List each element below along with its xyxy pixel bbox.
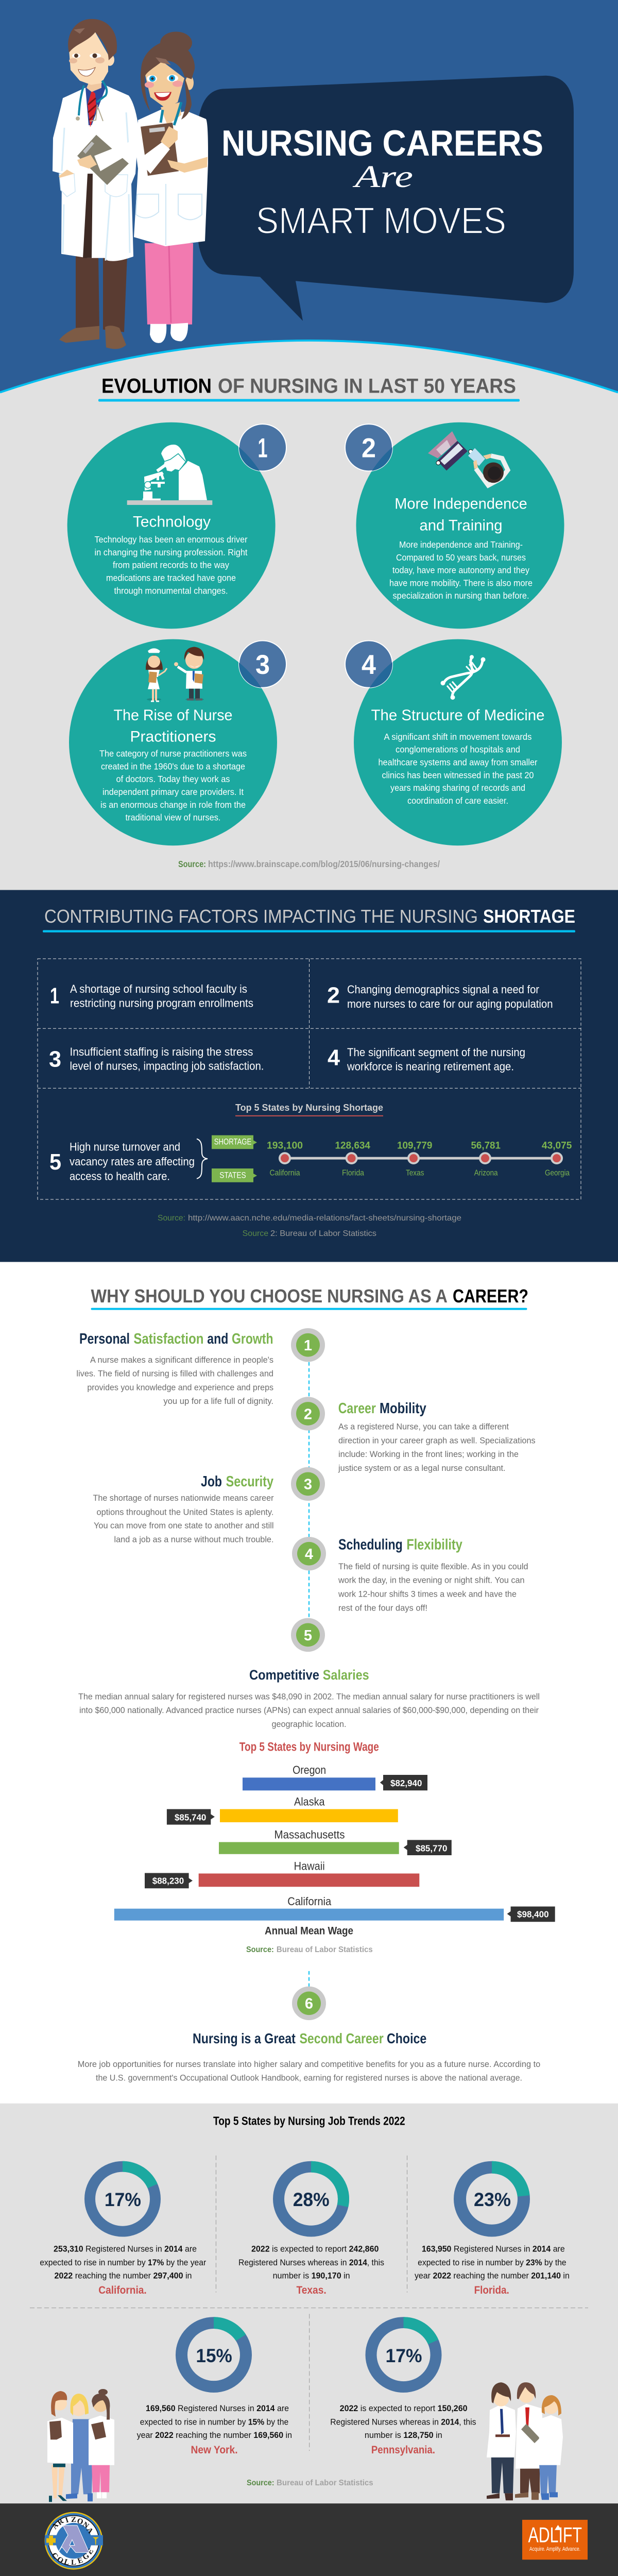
- illustration: male nurse: [53, 19, 139, 349]
- number badge 1: [238, 423, 287, 472]
- block: career mobility: As a registered Nurse, you can take a different: [338, 1421, 509, 1431]
- text: pennsylvania: Registered Nurses whereas in 2014, this: [330, 2417, 476, 2427]
- chart: shortage timeline: [267, 1140, 572, 1177]
- block: scheduling flexibility: work 12-hour shifts 3 times a week and have the: [338, 1589, 517, 1599]
- block: personal satisfaction and growth: lives. The field of nursing is filled with challenges and: [76, 1369, 273, 1379]
- block: job security: Security: [226, 1473, 273, 1490]
- number badge 3: [238, 640, 287, 688]
- text: independence description: More independence and Training-: [399, 539, 523, 550]
- bar: california: $98,400: [517, 1909, 549, 1920]
- text: pennsylvania: Pennsylvania.: [371, 2444, 435, 2456]
- logo: adlift: ADLIFT: [528, 2523, 582, 2547]
- title: smart moves: SMART MOVES: [256, 200, 506, 242]
- bar: massachusetts: Massachusetts: [274, 1828, 345, 1841]
- text: technology description: through monumental changes.: [114, 585, 228, 596]
- text: structure of medicine description: conglomerations of hospitals and: [396, 744, 520, 755]
- factor 4: The significant segment of the nursing: [347, 1046, 525, 1059]
- chart: shortage timeline: 193,100: [267, 1140, 303, 1151]
- text: technology description: from patient records to the way: [113, 560, 229, 570]
- chart: shortage timeline: Texas: [406, 1168, 424, 1177]
- sources: shortage: http://www.aacn.nche.edu/media-relations/fact-sheets/nursing-shortage: [188, 1214, 461, 1223]
- block: career mobility: [338, 1400, 536, 1473]
- donut: texas: 28%: [293, 2189, 330, 2210]
- factor 1: A shortage of nursing school faculty is: [70, 982, 247, 995]
- block: job security: The shortage of nurses nationwide means career: [93, 1493, 274, 1503]
- number badge 4: [345, 640, 393, 688]
- factor 2: [327, 983, 553, 1010]
- panel: technology: [67, 422, 276, 629]
- factor 1: restricting nursing program enrollments: [70, 997, 253, 1010]
- section background: evolution: [0, 341, 618, 890]
- block: career mobility: Career: [338, 1400, 376, 1417]
- step marker 1: [291, 1328, 325, 1362]
- text: new york: New York.: [191, 2444, 238, 2456]
- text: new york: year 2022 reaching the number 169,560 in: [137, 2430, 292, 2440]
- bar: hawaii: Hawaii: [294, 1860, 325, 1872]
- text: new york: [137, 2403, 292, 2456]
- text: florida: expected to rise in number by 23% by the: [418, 2258, 566, 2267]
- text: structure of medicine description: years making sharing of records and: [390, 783, 525, 793]
- illustration: female nurse: [134, 31, 208, 343]
- step marker 2: 2: [304, 1406, 312, 1422]
- icon: dna helix: [441, 655, 485, 700]
- bar: california: California: [287, 1895, 332, 1908]
- donut: pennsylvania: [371, 2323, 436, 2387]
- panel: rise of nurse practitioners: [69, 639, 277, 845]
- factor 3: Insufficient staffing is raising the stress: [70, 1045, 253, 1058]
- label: shortage: [212, 1135, 257, 1149]
- number badge 2: [345, 423, 393, 472]
- donut: new york: [181, 2323, 246, 2387]
- chart: shortage timeline: Arizona: [474, 1168, 498, 1177]
- factor 5: [49, 1141, 195, 1183]
- text: pennsylvania: 2022 is expected to report 150,260: [340, 2403, 468, 2413]
- text: structure of medicine description: coordination of care easier.: [407, 795, 508, 806]
- title: nursing careers: NURSING CAREERS: [221, 123, 543, 163]
- donut: california: 17%: [105, 2189, 141, 2210]
- text: florida: 163,950 Registered Nurses in 2014 are: [422, 2244, 565, 2254]
- icon: top-down laptop and worker: [428, 431, 508, 485]
- donut: texas: [279, 2167, 344, 2231]
- step marker 6: 6: [305, 1996, 313, 2012]
- logo: adlift: [522, 2520, 588, 2560]
- heading: structure of medicine: The Structure of Medicine: [371, 707, 545, 724]
- text: texas: number is 190,170 in: [273, 2271, 350, 2281]
- text: texas: [238, 2244, 384, 2296]
- text: nurse practitioners description: The category of nurse practitioners was: [99, 749, 247, 759]
- text: structure of medicine description: A significant shift in movement towards: [384, 732, 532, 742]
- bar: hawaii: [145, 1860, 419, 1888]
- curved cyan divider: [0, 341, 618, 393]
- block: competitive salaries: into $60,000 nationally. Advanced practice nurses (APNs) can expect annual salaries of $60,000-$90,000, depending on their: [79, 1705, 539, 1715]
- text: technology description: [94, 534, 248, 596]
- factor 1: 1: [50, 984, 59, 1009]
- factor 3: [49, 1045, 264, 1073]
- text: texas: 2022 is expected to report 242,860: [251, 2244, 379, 2254]
- block: competitive salaries: geographic location.: [272, 1719, 346, 1729]
- factor 1: [50, 982, 253, 1010]
- factor 4: workforce is nearing retirement age.: [347, 1060, 514, 1073]
- text: technology description: Technology has been an enormous driver: [94, 534, 248, 545]
- source: brainscape: https://www.brainscape.com/blog/2015/06/nursing-changes/: [208, 859, 440, 869]
- panel: job trends: [0, 2104, 618, 2503]
- chart title: nursing wage: Top 5 States by Nursing Wage: [239, 1740, 379, 1754]
- speech bubble with title: [197, 76, 574, 321]
- heading: evolution of nursing: EVOLUTION: [101, 375, 212, 398]
- text: texas: Texas.: [297, 2284, 327, 2296]
- bar: oregon: $82,940: [390, 1778, 422, 1788]
- factor 3: level of nurses, impacting job satisfaction.: [70, 1060, 264, 1073]
- bar: massachusetts: [219, 1828, 452, 1855]
- logo: arizona college: COLLEGE: [49, 2547, 95, 2567]
- block: competitive salaries: The median annual salary for registered nurses was $48,090 in 2002. The median annual salary for nurse practitioners is well: [78, 1691, 540, 1701]
- block: career mobility: Mobility: [380, 1400, 426, 1417]
- text: structure of medicine description: [379, 732, 538, 806]
- text: california: [40, 2244, 207, 2296]
- block: scheduling flexibility: work the day, in the evening or night shift. You can: [338, 1575, 525, 1585]
- block: scheduling flexibility: rest of the four days off!: [338, 1603, 427, 1613]
- icon: nurse and doctor: [146, 647, 204, 702]
- donut: new york: 15%: [196, 2345, 232, 2366]
- block: personal satisfaction and growth: and: [207, 1331, 228, 1347]
- text: new york: expected to rise in number by 15% by the: [140, 2417, 288, 2427]
- logo: arizona college: [44, 2512, 103, 2570]
- step marker 6: [292, 1987, 326, 2020]
- panel: independence and training: [356, 422, 564, 629]
- block: scheduling flexibility: The field of nursing is quite flexible. As in you could: [338, 1562, 528, 1571]
- block: scheduling flexibility: Scheduling: [338, 1537, 403, 1553]
- label: shortage: SHORTAGE: [214, 1137, 251, 1146]
- block: competitive salaries: Competitive: [249, 1667, 319, 1683]
- heading: evolution of nursing: [98, 375, 520, 401]
- text: nurse practitioners description: traditional view of nurses.: [125, 812, 220, 823]
- panel: structure of medicine: [354, 639, 562, 845]
- block: personal satisfaction and growth: A nurse makes a significant difference in people's: [90, 1355, 273, 1365]
- heading: evolution of nursing: OF NURSING IN LAST 50 YEARS: [218, 375, 516, 398]
- text: new york: 169,560 Registered Nurses in 2014 are: [146, 2403, 289, 2413]
- factor 2: Changing demographics signal a need for: [347, 983, 539, 996]
- icon: scientist at microscope: [127, 445, 212, 505]
- source: wage chart: Bureau of Labor Statistics: [277, 1945, 373, 1954]
- bar: alaska: Alaska: [294, 1795, 325, 1808]
- text: florida: year 2022 reaching the number 201,140 in: [415, 2271, 570, 2281]
- number badge 1: 1: [258, 433, 267, 463]
- text: florida: [415, 2244, 570, 2296]
- chart: shortage timeline: 128,634: [335, 1140, 370, 1151]
- sources: shortage: Source: [243, 1229, 268, 1238]
- text: technology description: medications are tracked have gone: [106, 573, 236, 583]
- block: second career choice: Choice: [387, 2030, 426, 2046]
- number badge 2: 2: [362, 433, 376, 463]
- chart: nursing wage bars: [114, 1764, 555, 1937]
- source: job trends: Bureau of Labor Statistics: [277, 2479, 373, 2487]
- block: career mobility: direction in your career graph as well. Specializations: [338, 1435, 536, 1445]
- block: personal satisfaction and growth: Personal: [79, 1331, 130, 1347]
- bar: oregon: Oregon: [293, 1764, 326, 1776]
- bar: oregon: [243, 1764, 427, 1790]
- factor 4: 4: [328, 1045, 340, 1071]
- block: scheduling flexibility: Flexibility: [406, 1537, 462, 1553]
- step marker 4: [292, 1537, 326, 1570]
- axis label: annual mean wage: Annual Mean Wage: [265, 1925, 353, 1937]
- chart: shortage timeline: 56,781: [471, 1140, 501, 1151]
- text: nurse practitioners description: [99, 749, 247, 823]
- title: are: Are: [352, 159, 413, 194]
- block: competitive salaries: Salaries: [323, 1667, 369, 1683]
- heading: technology: Technology: [133, 514, 211, 530]
- text: structure of medicine description: healthcare systems and away from smaller: [379, 757, 538, 768]
- logo: arizona college: ARIZONA: [50, 2516, 95, 2535]
- factor 4: [328, 1045, 525, 1073]
- text: florida: Florida.: [474, 2284, 509, 2296]
- text: nurse practitioners description: is an enormous change in role from the: [100, 800, 246, 810]
- heading: rise of nurse practitioners: [114, 707, 233, 745]
- label: states: [212, 1168, 257, 1182]
- factor 5: vacancy rates are affecting: [70, 1155, 195, 1168]
- source: wage chart: Source:: [246, 1945, 274, 1954]
- bar: california: [114, 1895, 555, 1922]
- text: independence description: today, have more autonomy and they: [392, 565, 529, 575]
- text: nurse practitioners description: of doctors. Today they work as: [116, 774, 230, 784]
- sources: shortage: [158, 1214, 461, 1238]
- block: second career choice: More job opportunities for nurses translate into higher salary and competitive benefits for you as a future nurse. According to: [78, 2059, 540, 2069]
- text: nurse practitioners description: created in the 1960's due to a shortage: [101, 761, 245, 771]
- heading: why choose nursing: CAREER?: [453, 1286, 528, 1307]
- bar: hawaii: $88,230: [152, 1875, 184, 1886]
- panel: contributing factors: [0, 890, 618, 1262]
- factor 5: 5: [49, 1149, 61, 1175]
- footer: [0, 2503, 618, 2576]
- donut: pennsylvania: 17%: [385, 2345, 422, 2366]
- heading: more independence and training: More Independence: [394, 496, 527, 513]
- number badge 3: 3: [255, 650, 270, 680]
- factor 2: more nurses to care for our aging population: [347, 997, 553, 1010]
- block: job security: You can move from one state to another and still: [94, 1521, 274, 1531]
- step marker 5: [291, 1618, 325, 1652]
- illustration: nurses group left: [47, 2389, 114, 2502]
- sources: shortage: 2: Bureau of Labor Statistics: [270, 1229, 376, 1238]
- block: personal satisfaction and growth: [76, 1331, 273, 1406]
- block: second career choice: Second Career: [300, 2030, 384, 2046]
- bar: alaska: $85,740: [175, 1812, 206, 1822]
- text: pennsylvania: number is 128,750 in: [365, 2430, 442, 2440]
- block: career mobility: include: Working in the front lines; working in the: [338, 1449, 519, 1459]
- block: career mobility: justice system or as a legal nurse consultant.: [338, 1463, 506, 1473]
- step marker 2: [291, 1397, 325, 1431]
- text: pennsylvania: [330, 2403, 476, 2456]
- heading: contributing factors: [43, 906, 575, 933]
- block: personal satisfaction and growth: Growth: [232, 1331, 273, 1347]
- step marker 4: 4: [305, 1546, 313, 1563]
- number badge 4: 4: [362, 650, 376, 680]
- label: states: STATES: [219, 1170, 246, 1180]
- text: independence description: [389, 539, 533, 601]
- text: independence description: have more mobility. There is also more: [389, 578, 533, 588]
- text: california: 2022 reaching the number 297,400 in: [55, 2271, 192, 2281]
- text: california: expected to rise in number by 17% by the year: [40, 2258, 207, 2267]
- heading: more independence and training: [394, 496, 527, 534]
- chart: shortage timeline: 109,779: [397, 1140, 432, 1151]
- source: brainscape: Source:: [178, 859, 206, 869]
- text: california: 253,310 Registered Nurses in 2014 are: [54, 2244, 197, 2254]
- block: personal satisfaction and growth: Satisfaction: [133, 1331, 203, 1347]
- block: second career choice: Nursing is a Great: [193, 2030, 296, 2046]
- block: personal satisfaction and growth: provides you knowledge and experience and preps: [87, 1382, 273, 1392]
- bar: massachusetts: $85,770: [416, 1843, 447, 1853]
- heading: contributing factors: SHORTAGE: [483, 906, 575, 927]
- heading: why choose nursing: WHY SHOULD YOU CHOOSE NURSING AS A: [91, 1286, 448, 1307]
- block: second career choice: the U.S. government's Occupational Outlook Handbook, earning for registered nurses is above the national average.: [96, 2073, 522, 2083]
- text: california: California.: [98, 2284, 147, 2296]
- factor 5: High nurse turnover and: [70, 1141, 180, 1154]
- block: job security: options throughout the United States is aplenty.: [97, 1507, 273, 1517]
- step marker 5: 5: [304, 1628, 312, 1644]
- text: technology description: in changing the nursing profession. Right: [94, 547, 248, 557]
- step marker 3: [291, 1467, 325, 1501]
- block: personal satisfaction and growth: you up for a life full of dignity.: [163, 1396, 273, 1406]
- timeline connector: [308, 1362, 310, 1618]
- block: scheduling flexibility: [338, 1537, 528, 1613]
- heading: rise of nurse practitioners: The Rise of Nurse: [114, 707, 233, 724]
- block: second career choice: [78, 2030, 540, 2083]
- donut: florida: 23%: [474, 2189, 511, 2210]
- chart title: top 5 states by nursing shortage: Top 5 States by Nursing Shortage: [235, 1103, 383, 1113]
- brace: [197, 1139, 208, 1179]
- source: job trends: Source:: [247, 2479, 274, 2487]
- heading: more independence and training: and Training: [419, 517, 502, 534]
- block: job security: [93, 1473, 274, 1544]
- timeline connector to step 6: [308, 1971, 310, 1987]
- chart: shortage timeline: 43,075: [542, 1140, 572, 1151]
- sources: shortage: Source:: [158, 1214, 185, 1223]
- chart: shortage timeline: California: [270, 1168, 300, 1177]
- hero background: [0, 0, 618, 409]
- logo: adlift: Acquire. Amplify. Advance.: [529, 2546, 580, 2552]
- factor 5: access to health care.: [70, 1170, 170, 1183]
- text: independence description: specialization in nursing than before.: [392, 590, 529, 601]
- heading: contributing factors: CONTRIBUTING FACTORS IMPACTING THE NURSING: [44, 906, 478, 927]
- text: texas: Registered Nurses whereas in 2014, this: [238, 2258, 384, 2267]
- bar: alaska: [167, 1795, 398, 1825]
- block: job security: Job: [201, 1473, 222, 1490]
- text: independence description: Compared to 50 years back, nurses: [396, 552, 526, 563]
- step marker 1: 1: [304, 1337, 312, 1354]
- illustration: nurses group right: [487, 2382, 563, 2500]
- chart: shortage timeline: Georgia: [545, 1168, 570, 1177]
- heading: rise of nurse practitioners: Practitioners: [130, 728, 216, 745]
- chart: shortage timeline: Florida: [342, 1168, 364, 1177]
- factor 3: 3: [49, 1047, 61, 1072]
- donut: florida: [460, 2167, 524, 2231]
- block: job security: land a job as a nurse without much trouble.: [114, 1535, 274, 1544]
- text: nurse practitioners description: independent primary care providers. It: [102, 787, 244, 797]
- step marker 3: 3: [304, 1477, 312, 1493]
- heading: job trends: Top 5 States by Nursing Job Trends 2022: [213, 2114, 405, 2127]
- block: competitive salaries: [78, 1667, 540, 1729]
- factor 2: 2: [327, 983, 340, 1008]
- donut: california: [90, 2166, 156, 2231]
- text: structure of medicine description: clinics has been witnessed in the past 20: [382, 770, 534, 780]
